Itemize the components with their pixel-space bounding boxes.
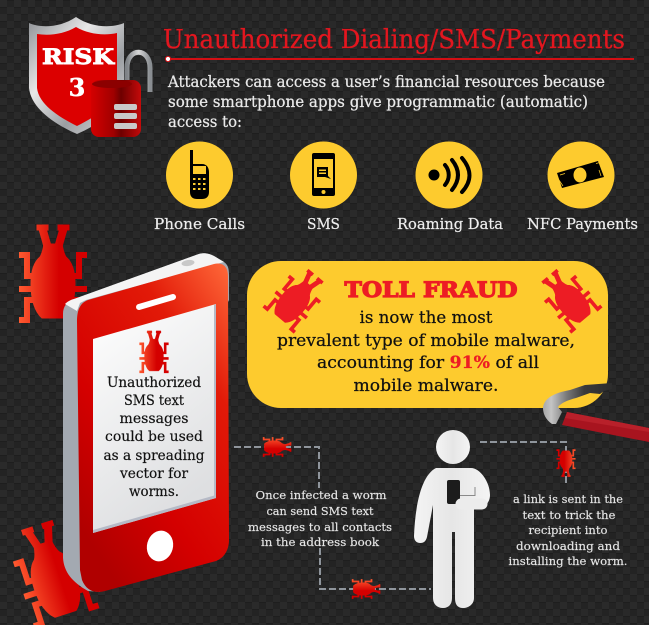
label: sms: SMS: [307, 217, 340, 233]
title: Unauthorized Dialing/SMS/Payments: [163, 25, 625, 55]
icon: bug left in callout: [264, 262, 332, 332]
label: phone calls: Phone Calls: [154, 217, 245, 233]
text: link trick: a link is sent in the: [513, 492, 623, 506]
text: link trick: [508, 492, 628, 568]
icon: bug right in callout: [533, 262, 601, 332]
callout text: is now the most: [360, 308, 493, 327]
risk number: 3: [69, 73, 85, 102]
risk label: RISK: [42, 44, 115, 69]
callout heading: TOLL FRAUD: [344, 277, 518, 302]
icon: red padlock: [91, 52, 150, 137]
text: worm sends sms: [248, 488, 392, 549]
phone screen text: Unauthorized: [107, 375, 201, 391]
phone screen text: as a spreading: [104, 448, 205, 464]
callout: toll fraud: [247, 261, 608, 408]
phone screen text: could be used: [105, 429, 203, 445]
callout text: prevalent type of mobile malware,: [277, 331, 575, 350]
dashed connector: person to link text: [480, 442, 566, 483]
label: roaming data: Roaming Data: [397, 217, 503, 233]
text: link trick: recipient into: [528, 523, 608, 537]
text: link trick: downloading and: [516, 539, 621, 553]
icon: bug top left: [19, 225, 87, 320]
phone screen text: messages: [120, 411, 188, 427]
text: worm sends sms: Once infected a worm: [256, 488, 387, 502]
icon: small bug upper: [264, 437, 291, 457]
intro text: access to:: [168, 113, 242, 131]
icon: roaming data: [416, 142, 482, 208]
intro text: some smartphone apps give programmatic (automatic): [168, 93, 588, 111]
person holding phone: [414, 430, 490, 608]
intro text: [167, 73, 605, 131]
icon: nfc payments: [548, 142, 614, 208]
text: link trick: installing the worm.: [508, 554, 628, 568]
callout text: [277, 308, 575, 395]
icon: bug bottom left: [5, 515, 99, 625]
text: link trick: text to trick the: [522, 508, 616, 522]
icon: small bug lower: [353, 579, 380, 599]
phone screen text: SMS text: [124, 393, 184, 409]
title underline: [165, 56, 634, 62]
text: worm sends sms: in the address book: [261, 535, 380, 549]
icon: phone calls: [166, 142, 233, 208]
icon: sms: [290, 142, 357, 208]
text: worm sends sms: can send SMS text: [266, 504, 374, 518]
intro text: Attackers can access a user’s financial resources because: [167, 73, 605, 91]
dashed connector: phone to address book text: [234, 447, 319, 488]
dashed connector: address book text to person: [320, 548, 431, 589]
smartphone: [63, 253, 229, 592]
callout text: mobile malware.: [354, 376, 498, 395]
phone screen text: [104, 375, 205, 500]
icon: small bug right: [556, 450, 576, 477]
icon: bug on screen: [139, 331, 169, 372]
text: worm sends sms: messages to all contacts: [248, 520, 392, 534]
icon: risk 3 shield: [29, 17, 124, 134]
callout text: accounting for 91% of all: [317, 353, 539, 372]
icon: crowbar: [543, 383, 649, 442]
phone screen text: worms.: [129, 484, 179, 500]
label: nfc payments: NFC Payments: [527, 217, 638, 233]
phone screen text: vector for: [119, 466, 188, 482]
